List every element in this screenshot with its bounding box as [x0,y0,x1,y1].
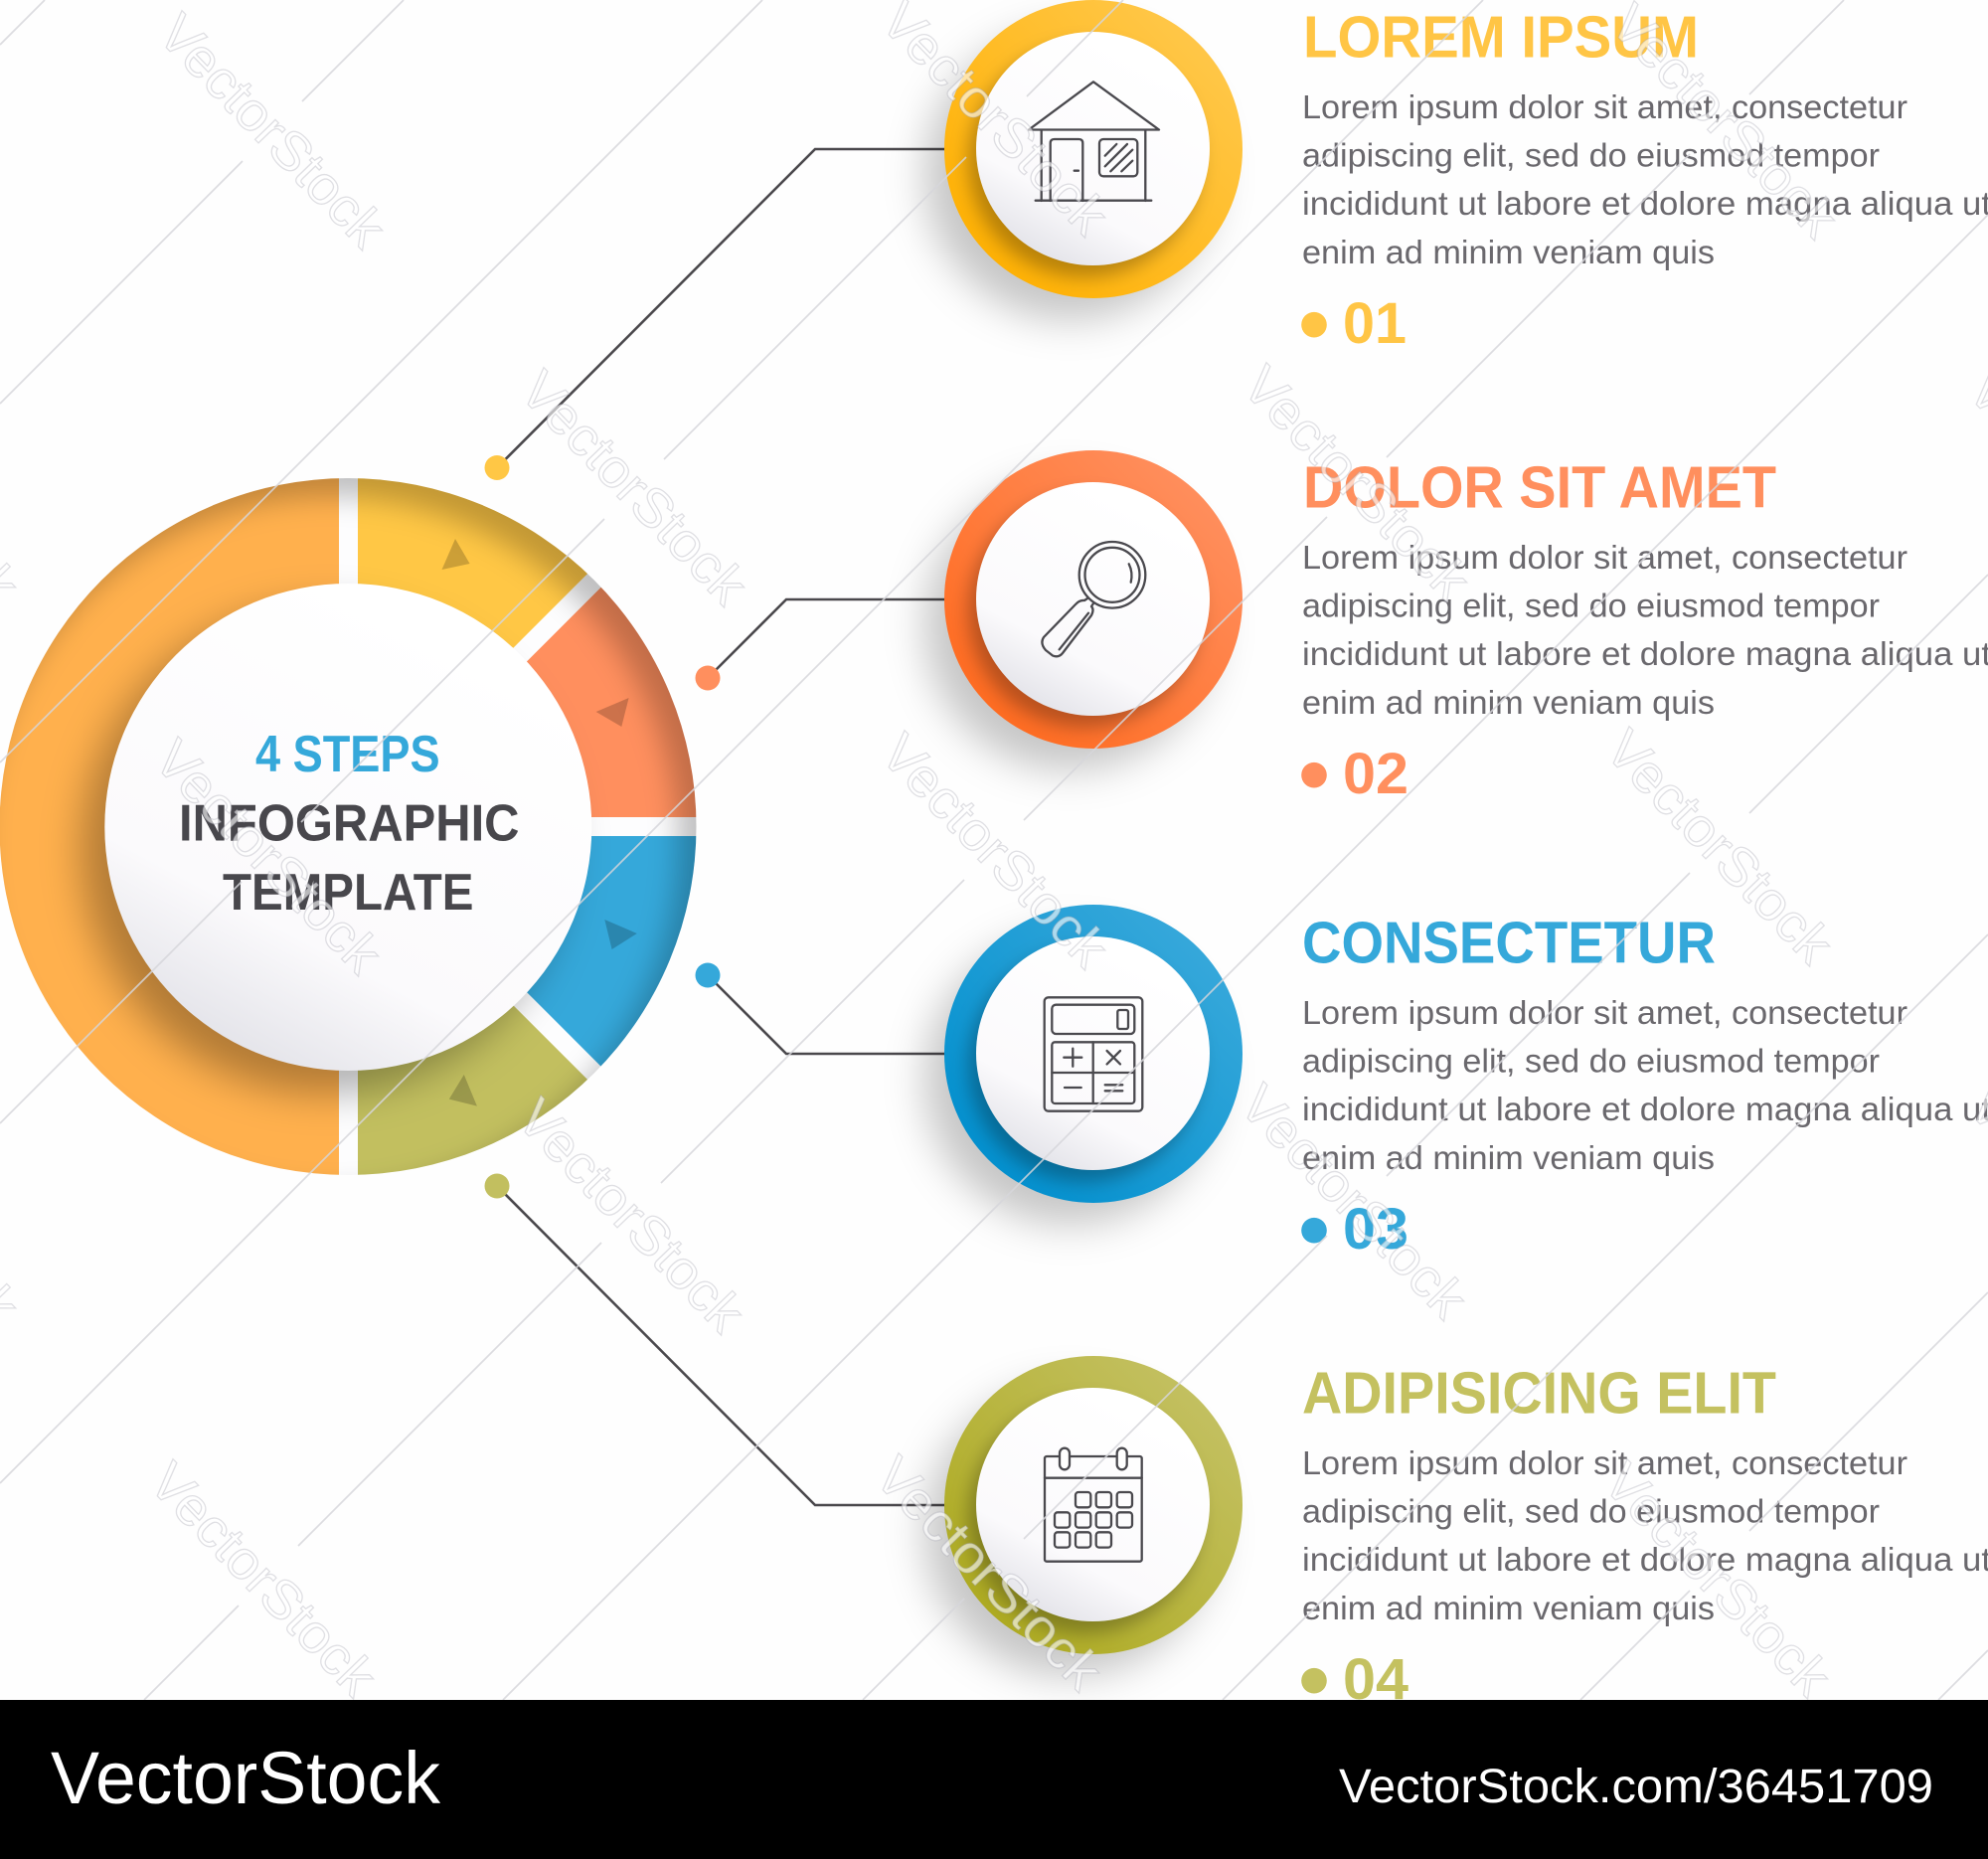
watermark pattern: VectorStock [143,729,394,985]
step number 02 [1301,742,1408,806]
footer image reference: VectorStock.com/36451709 [1339,1761,1933,1813]
footer logo text: VectorStock [51,1737,441,1819]
donut chart: 4 steps [0,478,696,1175]
body text 4: Lorem ipsum dolor sit amet, consectetur [1302,1444,1907,1481]
watermark pattern: VectorStock [509,360,759,616]
body text 3: adipiscing elit, sed do eiusmod tempor [1302,1042,1880,1080]
body text 1 [1302,88,1988,270]
badge ring 1 [924,0,1242,320]
icon: house [1029,82,1159,201]
body text 1: Lorem ipsum dolor sit amet, consectetur [1302,88,1907,125]
body text 3 [1302,994,1988,1176]
icon: magnifying glass [1042,542,1145,656]
center title [179,726,519,922]
watermark pattern: VectorStock [1232,355,1482,611]
step number 01: 01 [1343,291,1407,356]
panel: step 03 [696,905,1988,1262]
segment: orange half [0,467,339,1183]
connector line 2 [708,599,946,678]
segment: blue [527,836,696,1066]
center disc [104,584,591,1071]
watermark pattern: VectorStock [1592,1451,1843,1708]
watermark pattern: VectorStock [1594,719,1845,975]
connector line 1 [497,149,946,467]
watermark pattern: VectorStock [506,1088,756,1344]
watermark pattern: VectorStock [864,1445,1114,1702]
donut segments [0,478,696,1175]
watermark pattern: VectorStock [1229,1074,1479,1330]
connector dot 3 [696,962,720,988]
body text 2: enim ad minim veniam quis [1302,684,1715,721]
step number 04 [1301,1647,1408,1712]
center title: TEMPLATE [223,864,473,922]
outer inset shadow [2,478,696,1165]
panel: step 04 [485,1173,1988,1712]
heading 4: ADIPISICING ELIT [1302,1361,1776,1427]
body text 2: Lorem ipsum dolor sit amet, consectetur [1302,539,1907,576]
body text 2: incididunt ut labore et dolore magna aliqua ut [1302,635,1988,672]
badge ring 4 [924,1356,1242,1676]
step number 03: 03 [1343,1197,1408,1262]
center title: INFOGRAPHIC [179,795,519,853]
footer bar [0,1700,1988,1859]
body text 3: incididunt ut labore et dolore magna aliqua ut [1302,1091,1988,1127]
connector dot 4 [485,1173,509,1199]
body text 4: enim ad minim veniam quis [1302,1590,1715,1626]
body text 1: incididunt ut labore et dolore magna aliqua ut [1302,185,1988,222]
body text 1: adipiscing elit, sed do eiusmod tempor [1302,137,1880,173]
step number 02: 02 [1343,742,1408,806]
segment: coral [527,587,696,817]
icon: calculator [1045,997,1142,1111]
body text 2: adipiscing elit, sed do eiusmod tempor [1302,587,1880,624]
inner disc shadow [82,606,569,1094]
step number 04: 04 [1343,1647,1408,1712]
step number 03 [1301,1197,1408,1262]
badge ring 3 [924,905,1242,1225]
panel: step 02 [696,450,1988,806]
watermark pattern: VectorStock [1599,0,1850,250]
body text 4 [1302,1444,1988,1626]
heading 3: CONSECTETUR [1302,911,1716,976]
direction arrows [441,539,637,1106]
heading 1: LOREM IPSUM [1303,5,1699,71]
connector dot 1 [485,455,509,480]
body text 3: Lorem ipsum dolor sit amet, consectetur [1302,994,1907,1031]
panel: step 01 [485,0,1988,480]
connector line 3 [708,975,946,1054]
connector dot 2 [696,666,720,690]
step number 01 [1301,291,1407,356]
badge ring 2 [924,450,1242,770]
icon: calendar [1045,1448,1142,1562]
segment: yellow [358,478,587,648]
body text 4: incididunt ut labore et dolore magna aliqua ut [1302,1541,1988,1578]
segment: olive [358,1006,587,1175]
watermark pattern: VectorStock [870,723,1120,979]
heading 2: DOLOR SIT AMET [1303,455,1776,521]
center title: 4 STEPS [255,726,440,783]
watermark pattern: VectorStock [147,3,398,259]
body text 1: enim ad minim veniam quis [1302,234,1715,270]
connector line 4 [497,1186,946,1505]
watermark pattern: VectorStock [138,1451,389,1708]
body text 3: enim ad minim veniam quis [1302,1139,1715,1176]
body text 2 [1302,539,1988,721]
body text 4: adipiscing elit, sed do eiusmod tempor [1302,1493,1880,1529]
